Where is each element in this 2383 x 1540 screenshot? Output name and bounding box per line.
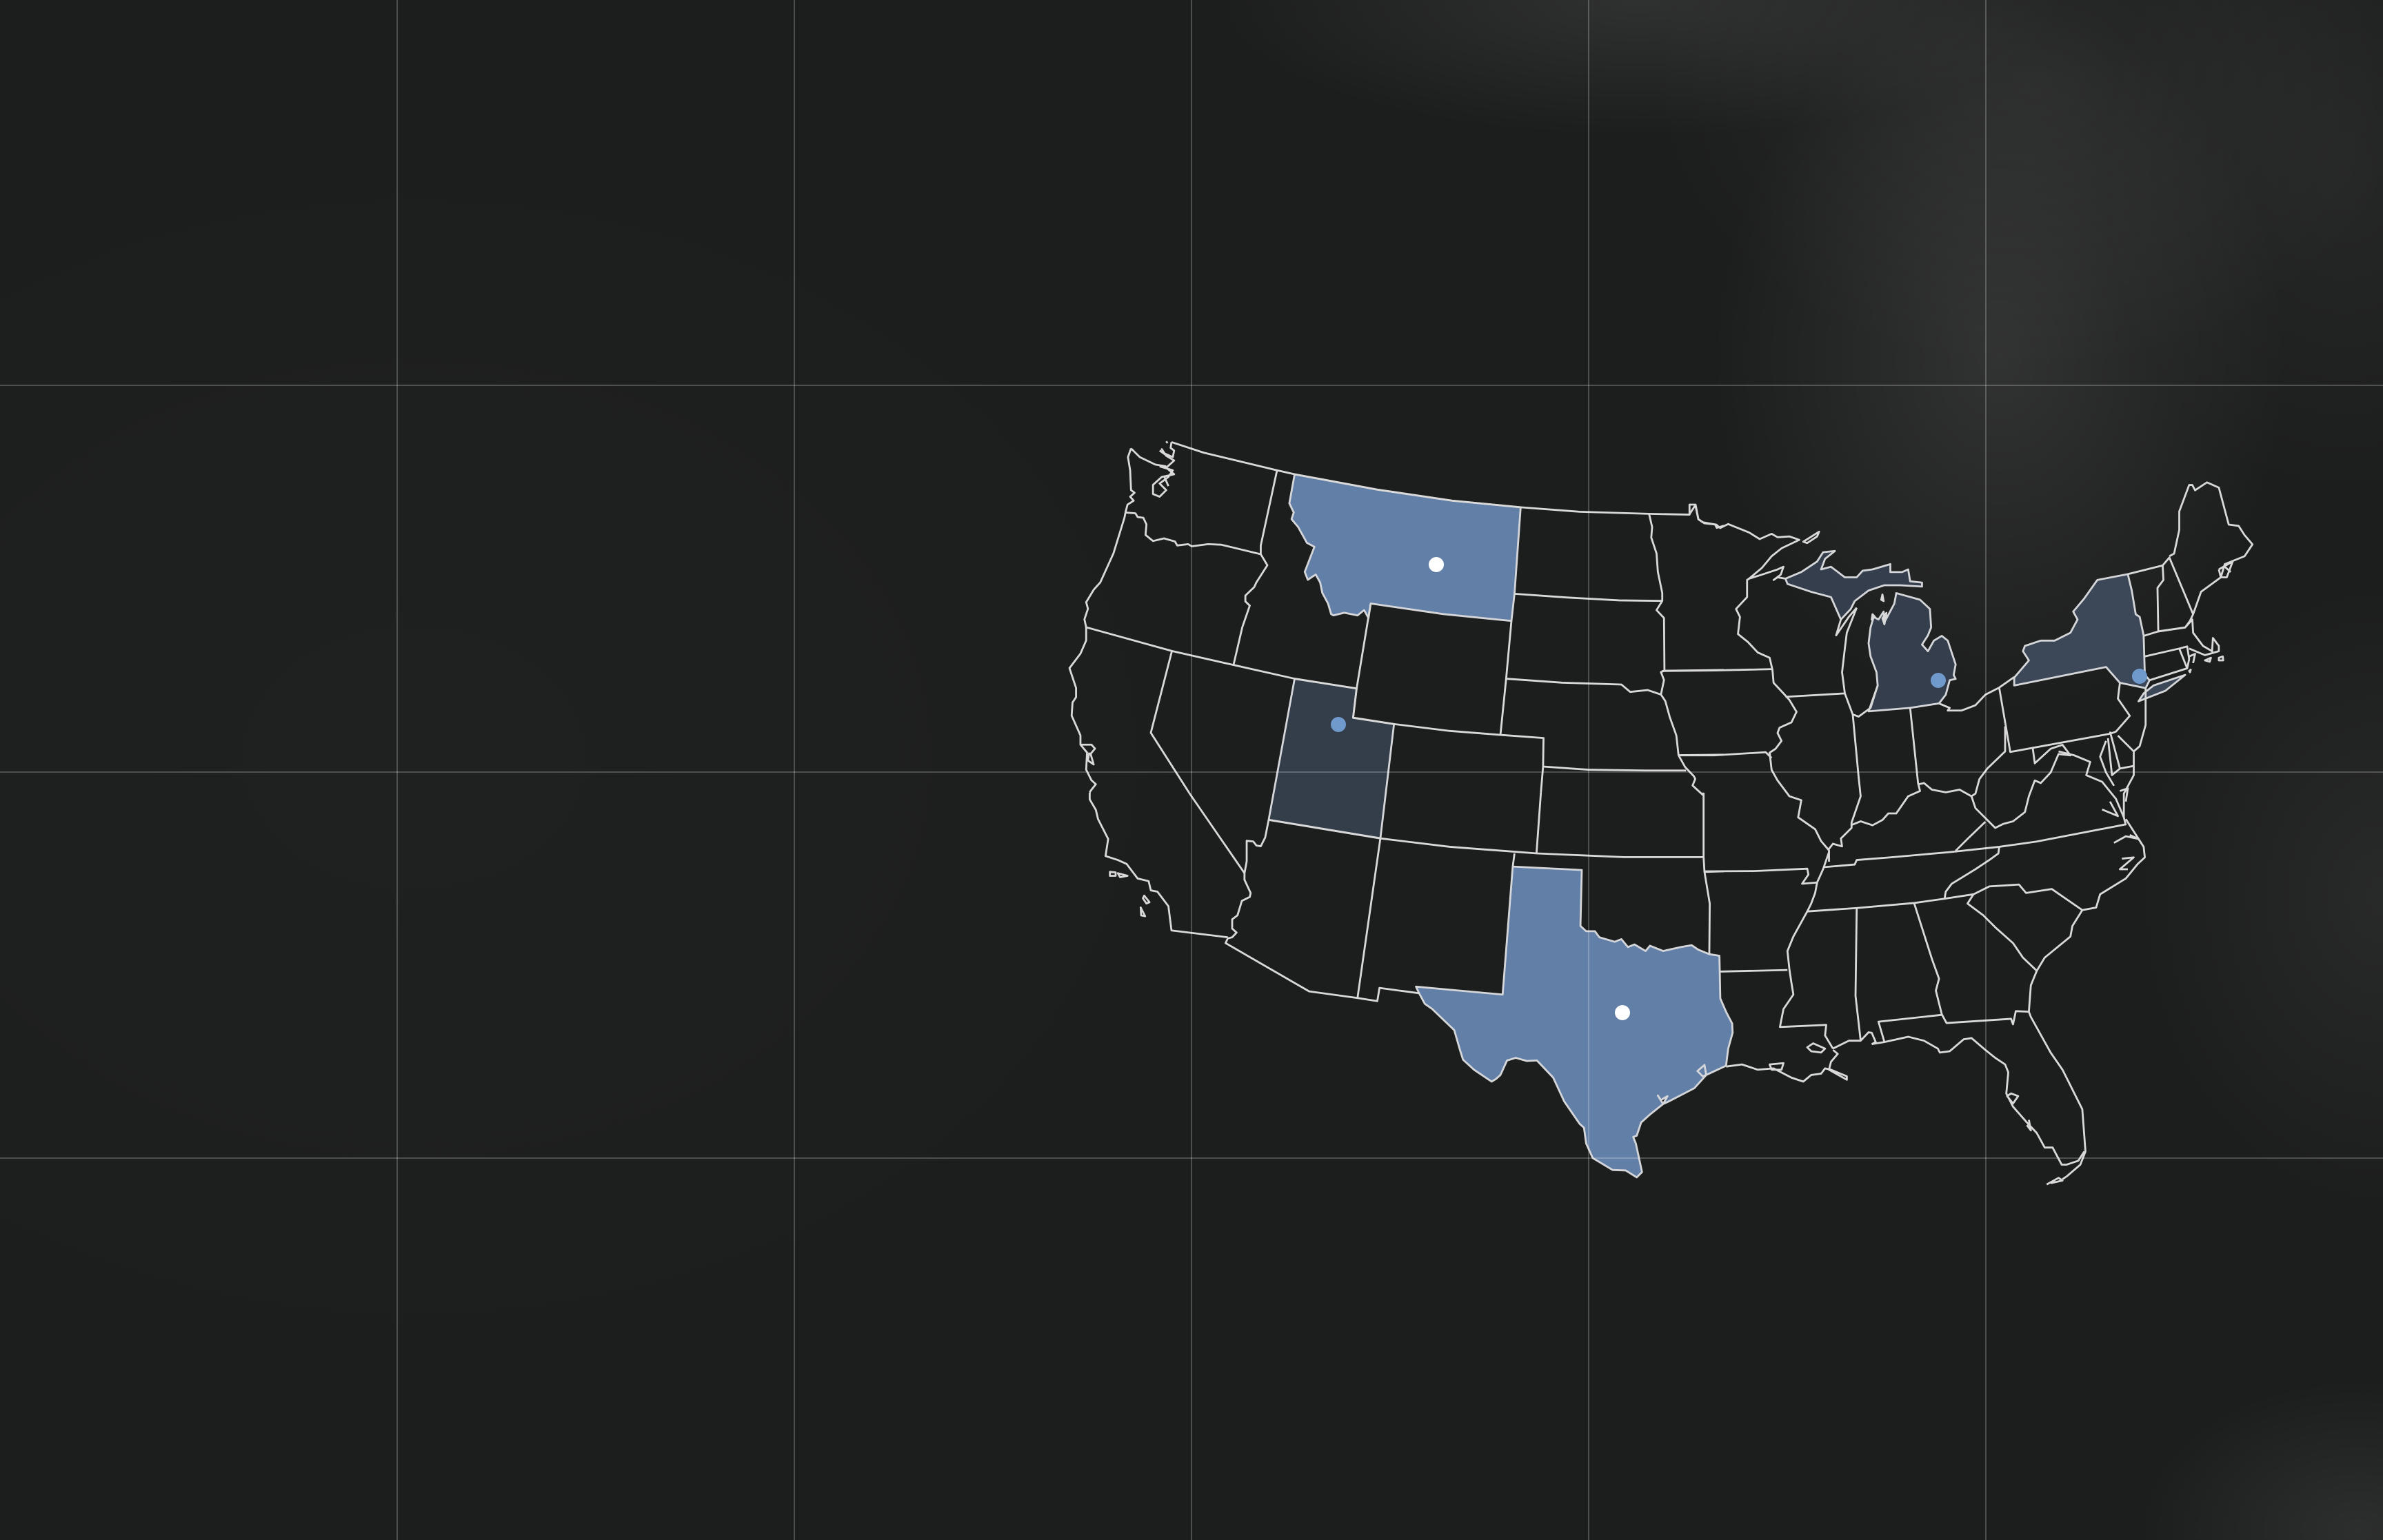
state borders: west <box>1069 441 1724 795</box>
state: Michigan <box>1785 551 1955 711</box>
marker: Michigan <box>1931 673 1946 688</box>
marker: Utah <box>1331 717 1346 732</box>
state borders: south-east <box>1705 819 2145 1184</box>
state: Montana <box>1289 474 1520 621</box>
state: Utah <box>1269 679 1394 838</box>
state: Texas <box>1416 867 1733 1177</box>
marker: Texas <box>1615 1005 1630 1020</box>
state borders: north-east <box>1662 483 2253 862</box>
marker: Montana <box>1429 557 1444 572</box>
marker: New York <box>2132 669 2147 684</box>
state borders: south-west <box>1089 793 1724 1001</box>
state: New York <box>2014 574 2185 701</box>
